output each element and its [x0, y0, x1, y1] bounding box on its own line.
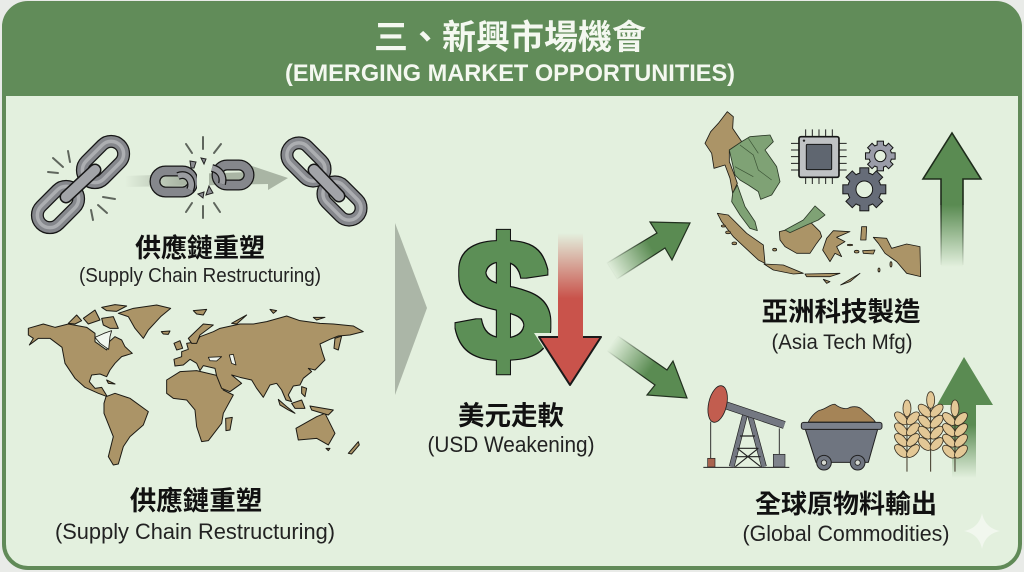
icon: wheat — [892, 392, 970, 472]
label: supply chain top: (Supply Chain Restructuring) — [79, 265, 321, 287]
label: global commodities: (Global Commodities) — [742, 521, 950, 546]
icon: sparkle — [964, 513, 1000, 549]
wheat left — [892, 400, 922, 472]
icon: gears — [842, 141, 896, 211]
gear large — [842, 167, 886, 211]
label: Asia tech: (Asia Tech Mfg) — [772, 331, 912, 354]
arrow: chain flow — [125, 166, 288, 190]
chain right — [282, 138, 366, 225]
arrow: to commodities — [606, 336, 687, 398]
arrow: to Asia tech — [607, 222, 690, 279]
icon: ore cart — [801, 404, 882, 470]
heading: global commodities: 全球原物料輸出 — [755, 489, 937, 519]
label: supply chain bottom: (Supply Chain Restructuring) — [55, 519, 335, 544]
header band — [2, 2, 1022, 96]
broken links — [155, 165, 249, 192]
arrow: lower growth — [937, 357, 993, 478]
heading: supply chain top: 供應鏈重塑 — [135, 233, 265, 263]
arrow: upper growth — [923, 133, 981, 267]
subtitle: (EMERGING MARKET OPPORTUNITIES) — [285, 60, 735, 87]
arrow: red down arrow — [534, 233, 604, 389]
title: 三、新興市場機會 — [374, 19, 646, 57]
label: USD weakening: (USD Weakening) — [428, 432, 594, 457]
icon: dollar sign: $ — [455, 204, 551, 396]
gear small — [865, 141, 896, 171]
heading: Asia tech: 亞洲科技製造 — [762, 297, 921, 327]
heading: USD weakening: 美元走軟 — [458, 401, 564, 431]
icon: broken supply chain — [32, 136, 366, 233]
impact marks left — [48, 151, 115, 220]
icon: oil pump — [703, 384, 789, 467]
wheat middle — [916, 392, 945, 472]
wheat right — [940, 400, 970, 472]
arrow: large chevron — [395, 223, 427, 395]
fragments — [190, 158, 213, 198]
title — [285, 19, 735, 87]
icon: microchip — [791, 129, 847, 184]
map: southeast Asia — [705, 112, 921, 285]
spark marks centre — [186, 137, 221, 218]
icon: world map — [28, 305, 363, 465]
heading: supply chain bottom: 供應鏈重塑 — [130, 486, 262, 516]
chain left — [32, 136, 129, 233]
